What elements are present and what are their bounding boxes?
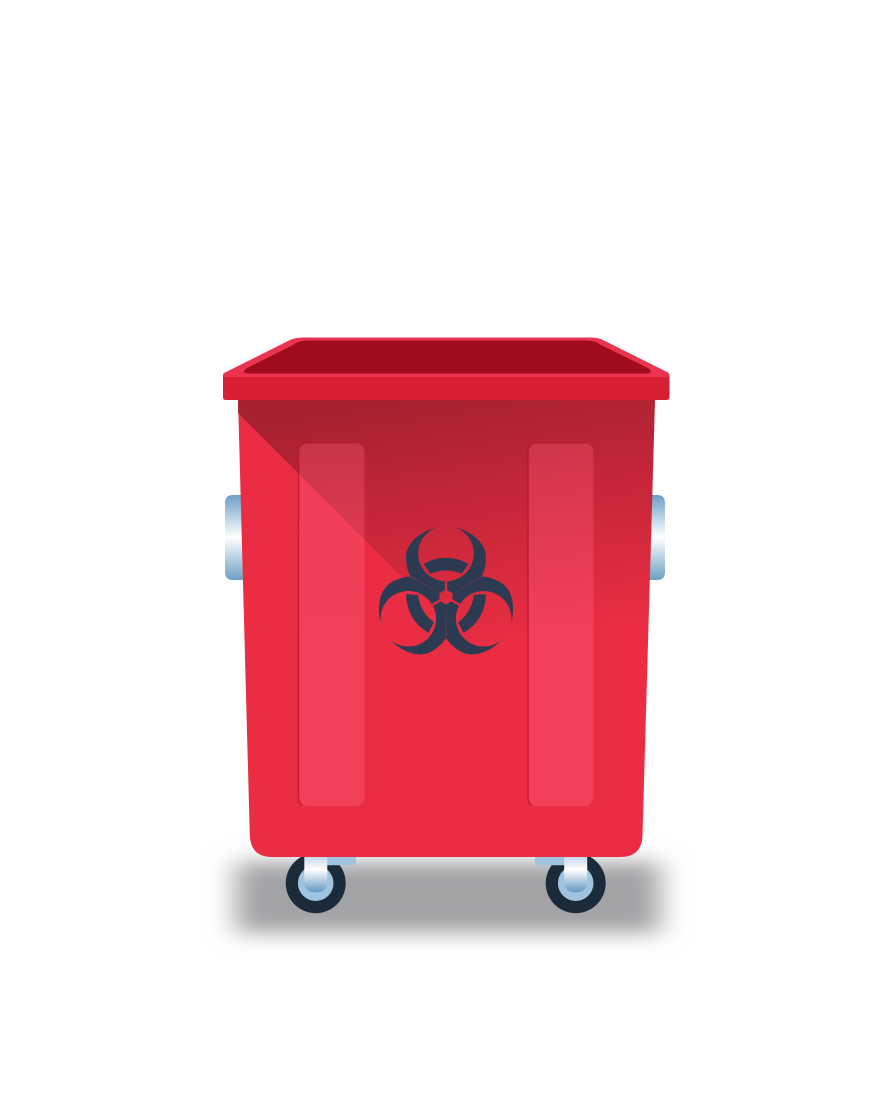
- icon: biohazard symbol: [378, 528, 514, 654]
- left recessed panel: [298, 443, 364, 806]
- right handle: [649, 495, 665, 580]
- lid front band: [223, 377, 670, 400]
- bin lid: [223, 338, 670, 400]
- right wheel: [535, 850, 606, 913]
- lid opening: [244, 340, 651, 374]
- right recessed panel: [528, 443, 594, 806]
- bin body: [238, 398, 655, 857]
- left wheel: [286, 850, 356, 913]
- infographic: biohazard waste bin: [218, 338, 678, 946]
- left handle: [225, 495, 243, 580]
- lid top rim: [223, 338, 670, 380]
- ground shadow: [236, 862, 660, 933]
- body shadow from lid: [238, 398, 655, 660]
